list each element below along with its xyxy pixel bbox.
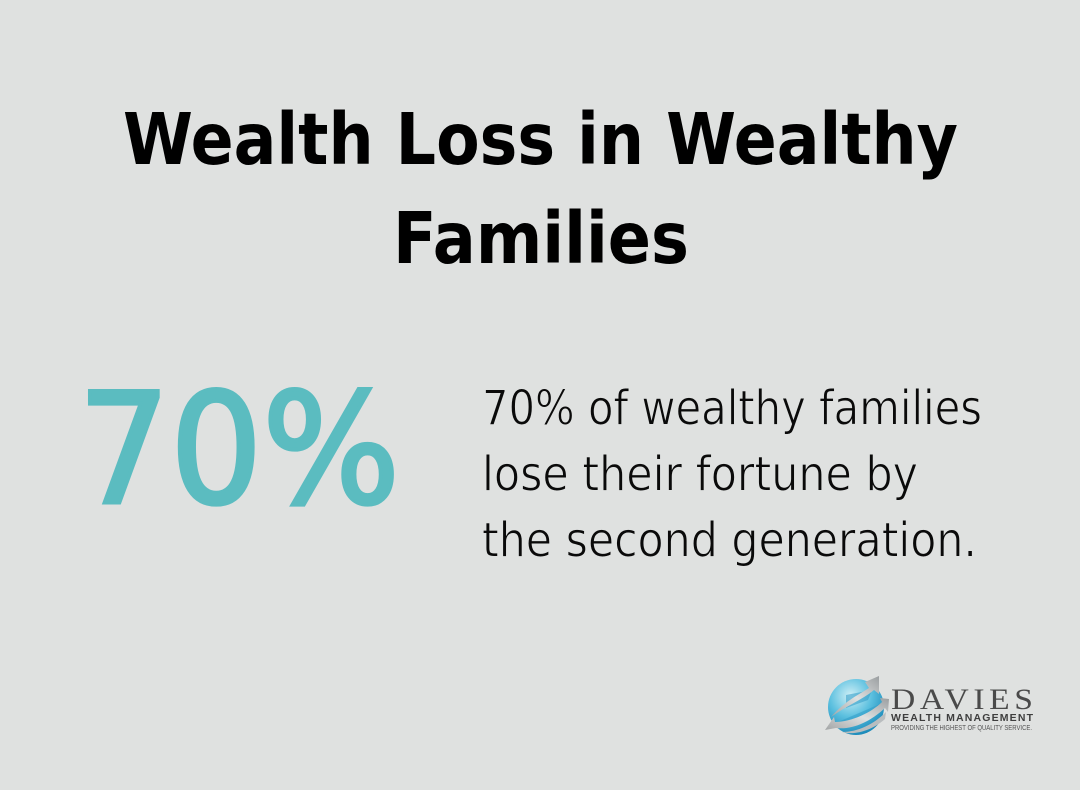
logo: Davies Wealth Management bbox=[825, 676, 1034, 735]
statistic description: the second generation. bbox=[482, 512, 977, 568]
logo tagline: PROVIDING THE HIGHEST OF QUALITY SERVICE. bbox=[891, 725, 1032, 732]
statistic description: 70% of wealthy families bbox=[482, 380, 982, 436]
icon: globe with arrows bbox=[825, 676, 889, 735]
logo subtitle: WEALTH MANAGEMENT bbox=[891, 712, 1034, 724]
statistic description bbox=[482, 380, 982, 568]
logo wordmark: DAVIES bbox=[891, 683, 1033, 716]
statistic description: lose their fortune by bbox=[482, 446, 918, 502]
big statistic: 70%: 70% bbox=[78, 362, 400, 540]
title: Families bbox=[393, 197, 689, 280]
title bbox=[123, 98, 958, 280]
title: Wealth Loss in Wealthy bbox=[123, 98, 958, 181]
